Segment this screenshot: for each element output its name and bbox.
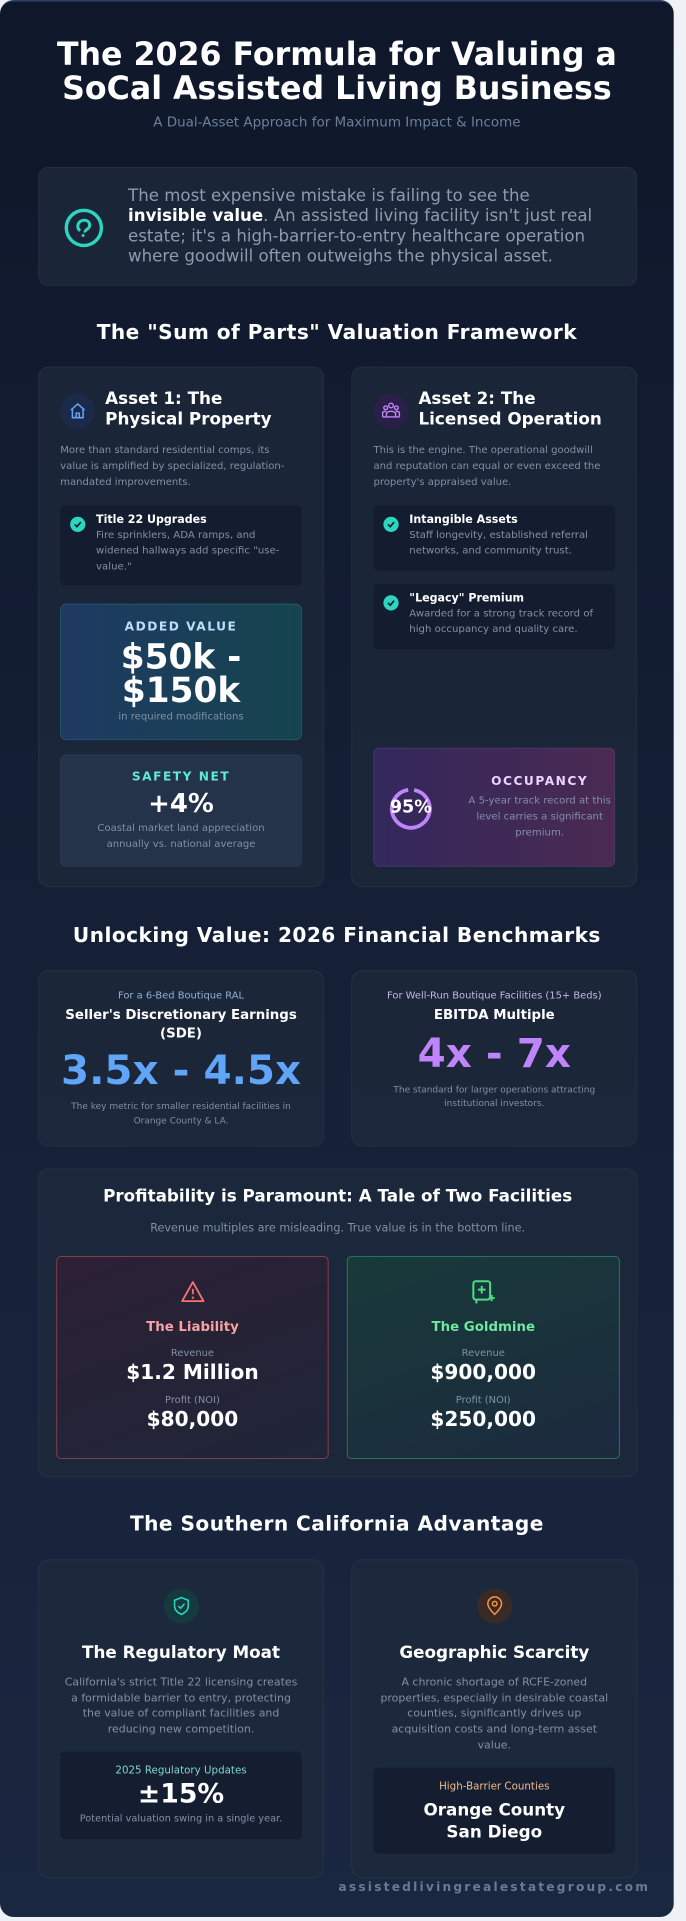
icon: warning <box>181 1281 204 1302</box>
panel: EBITDA benchmark: 4x - 7x <box>418 1031 571 1077</box>
text <box>380 1676 608 1751</box>
description: mandated improvements. <box>60 476 191 488</box>
icon: people <box>374 394 408 428</box>
item: legacy premium <box>373 584 615 649</box>
stat: ±15%: Potential valuation swing in a single year. <box>80 1813 282 1825</box>
heading: Asset 2: The <box>418 389 536 409</box>
box: the goldmine: $900,000 <box>430 1361 536 1384</box>
heading: The Regulatory Moat <box>82 1643 280 1662</box>
icon: house <box>60 394 95 428</box>
footer url: assistedlivingrealestategroup.com <box>338 1880 650 1894</box>
icon: shield <box>164 1588 199 1624</box>
stat: safety net <box>60 755 302 867</box>
panel: SDE benchmark: Orange County & LA. <box>134 1115 228 1126</box>
stat: added value: $150k <box>122 670 240 710</box>
panel: profitability <box>38 1168 637 1477</box>
item: legacy premium: "Legacy" Premium <box>409 592 524 604</box>
description: property's appraised value. <box>373 476 511 488</box>
description <box>373 444 600 488</box>
callout text: where goodwill often outweighs the physical asset. <box>128 247 553 266</box>
stat: ±15%: 2025 Regulatory Updates <box>115 1765 247 1777</box>
panel: EBITDA benchmark: institutional investors. <box>444 1098 544 1108</box>
box: the goldmine: Profit (NOI) <box>456 1395 511 1406</box>
heading: financial benchmarks: Unlocking Value: 2026 Financial Benchmarks <box>73 924 601 947</box>
text: value. <box>478 1739 511 1751</box>
description: More than standard residential comps, its <box>60 444 270 456</box>
callout text: estate; it's a high-barrier-to-entry healthcare operation <box>128 227 585 246</box>
panel: SDE benchmark: (SDE) <box>160 1026 202 1041</box>
item: title 22 upgrades: Fire sprinklers, ADA ramps, and <box>96 530 255 541</box>
heading: Physical Property <box>105 410 272 429</box>
title: The 2026 Formula for Valuing a <box>57 35 617 72</box>
stat: occupancy: A 5-year track record at this <box>468 795 611 806</box>
heading: Profitability is Paramount: A Tale of Two Facilities <box>103 1187 572 1206</box>
panel: EBITDA benchmark: The standard for larger operations attracting <box>393 1084 595 1095</box>
subtitle: A Dual-Asset Approach for Maximum Impact & Income <box>153 115 521 130</box>
title <box>57 35 617 107</box>
description: value is amplified by specialized, regulation- <box>60 460 284 472</box>
item: intangible assets: Intangible Assets <box>409 514 518 526</box>
stat: added value: in required modifications <box>118 711 244 723</box>
text: properties, especially in desirable coastal <box>380 1692 608 1704</box>
description: This is the engine. The operational goodwill <box>373 444 593 456</box>
box: the goldmine <box>347 1256 620 1459</box>
stat: occupancy: OCCUPANCY <box>491 774 588 788</box>
stat: ±15%: ±15% <box>138 1779 224 1810</box>
heading <box>105 389 272 429</box>
heading: southern california advantage: The Southern California Advantage <box>130 1512 544 1536</box>
box: the liability: $1.2 Million <box>126 1361 259 1384</box>
box: the liability: The Liability <box>146 1319 239 1335</box>
text: reducing new competition. <box>108 1723 254 1736</box>
stat: safety net: +4% <box>148 788 214 819</box>
panel: geographic scarcity <box>351 1560 637 1878</box>
text: A chronic shortage of RCFE-zoned <box>401 1676 587 1688</box>
text: California's strict Title 22 licensing creates <box>65 1676 297 1688</box>
icon: safe <box>472 1280 495 1304</box>
stat: counties: Orange County <box>423 1801 565 1820</box>
heading: Geographic Scarcity <box>399 1643 589 1662</box>
item: intangible assets: networks, and community trust. <box>409 545 572 557</box>
callout text: The most expensive mistake is failing to see the <box>128 187 530 206</box>
text: acquisition costs and long-term asset <box>392 1723 597 1736</box>
panel: asset 1 physical property <box>38 367 324 887</box>
item: title 22 upgrades <box>60 505 302 585</box>
text: counties, significantly drives up <box>407 1708 581 1720</box>
item: intangible assets: Staff longevity, established referral <box>409 530 588 541</box>
item: title 22 upgrades: Title 22 Upgrades <box>96 514 207 526</box>
stat: safety net: Coastal market land appreciation <box>97 822 265 834</box>
box: the liability: $80,000 <box>147 1408 238 1431</box>
box: the liability <box>56 1256 329 1459</box>
item: title 22 upgrades: value." <box>96 561 132 572</box>
box: the goldmine: Revenue <box>462 1348 505 1359</box>
stat: counties <box>373 1768 615 1854</box>
callout: invisible value <box>38 167 637 286</box>
stat: safety net: SAFETY NET <box>132 769 230 784</box>
heading: Asset 1: The <box>105 389 222 409</box>
stat: safety net: annually vs. national average <box>107 838 255 850</box>
callout text: invisible value. An assisted living facility isn't just real <box>128 207 592 226</box>
text <box>65 1676 297 1736</box>
heading <box>418 389 602 429</box>
stat: occupancy: premium. <box>515 827 564 838</box>
box: the liability: Revenue <box>171 1348 214 1359</box>
panel: SDE benchmark: Seller's Discretionary Earnings <box>65 1008 297 1023</box>
ring 95% <box>390 788 432 830</box>
icon: map pin <box>477 1588 512 1624</box>
text: the value of compliant facilities and <box>83 1708 279 1720</box>
stat: added value: ADDED VALUE <box>125 619 237 633</box>
box: the liability: Profit (NOI) <box>165 1395 220 1406</box>
item: legacy premium: high occupancy and quality care. <box>409 624 578 635</box>
callout text <box>128 187 592 266</box>
stat: occupancy <box>373 748 615 867</box>
stat: counties: High-Barrier Counties <box>439 1781 550 1793</box>
heading: sum of parts: The "Sum of Parts" Valuation Framework <box>97 321 577 345</box>
heading: Licensed Operation <box>418 410 602 429</box>
stat: counties: San Diego <box>446 1823 542 1842</box>
description: and reputation can equal or even exceed the <box>373 460 600 472</box>
panel: SDE benchmark <box>38 970 324 1146</box>
subtitle: Revenue multiples are misleading. True value is in the bottom line. <box>150 1222 525 1235</box>
panel: EBITDA benchmark: EBITDA Multiple <box>434 1008 555 1023</box>
panel: regulatory moat <box>38 1560 324 1878</box>
stat: ±15% <box>60 1752 302 1839</box>
stat: occupancy: level carries a significant <box>476 811 603 822</box>
panel: SDE benchmark: 3.5x - 4.5x <box>61 1047 301 1094</box>
box: the goldmine: $250,000 <box>430 1408 536 1431</box>
stat: added value: $50k - <box>121 636 241 677</box>
panel: SDE benchmark: The key metric for smaller residential facilities in <box>71 1101 291 1111</box>
title: SoCal Assisted Living Business <box>62 69 612 107</box>
box: the goldmine: The Goldmine <box>431 1319 535 1335</box>
panel: asset 2 licensed operation <box>351 367 637 887</box>
item: title 22 upgrades: widened hallways add specific "use- <box>96 545 279 557</box>
panel: SDE benchmark: For a 6-Bed Boutique RAL <box>118 990 244 1002</box>
panel: EBITDA benchmark: For Well-Run Boutique Facilities (15+ Beds) <box>387 990 602 1002</box>
stat: added value <box>60 604 302 740</box>
description <box>60 444 284 488</box>
item: legacy premium: Awarded for a strong track record of <box>409 608 593 620</box>
item: intangible assets <box>373 505 615 571</box>
icon: lightbulb <box>64 208 104 248</box>
panel: EBITDA benchmark <box>351 970 637 1146</box>
text: a formidable barrier to entry, protecting <box>71 1692 291 1704</box>
stat: occupancy: 95% <box>390 797 432 817</box>
